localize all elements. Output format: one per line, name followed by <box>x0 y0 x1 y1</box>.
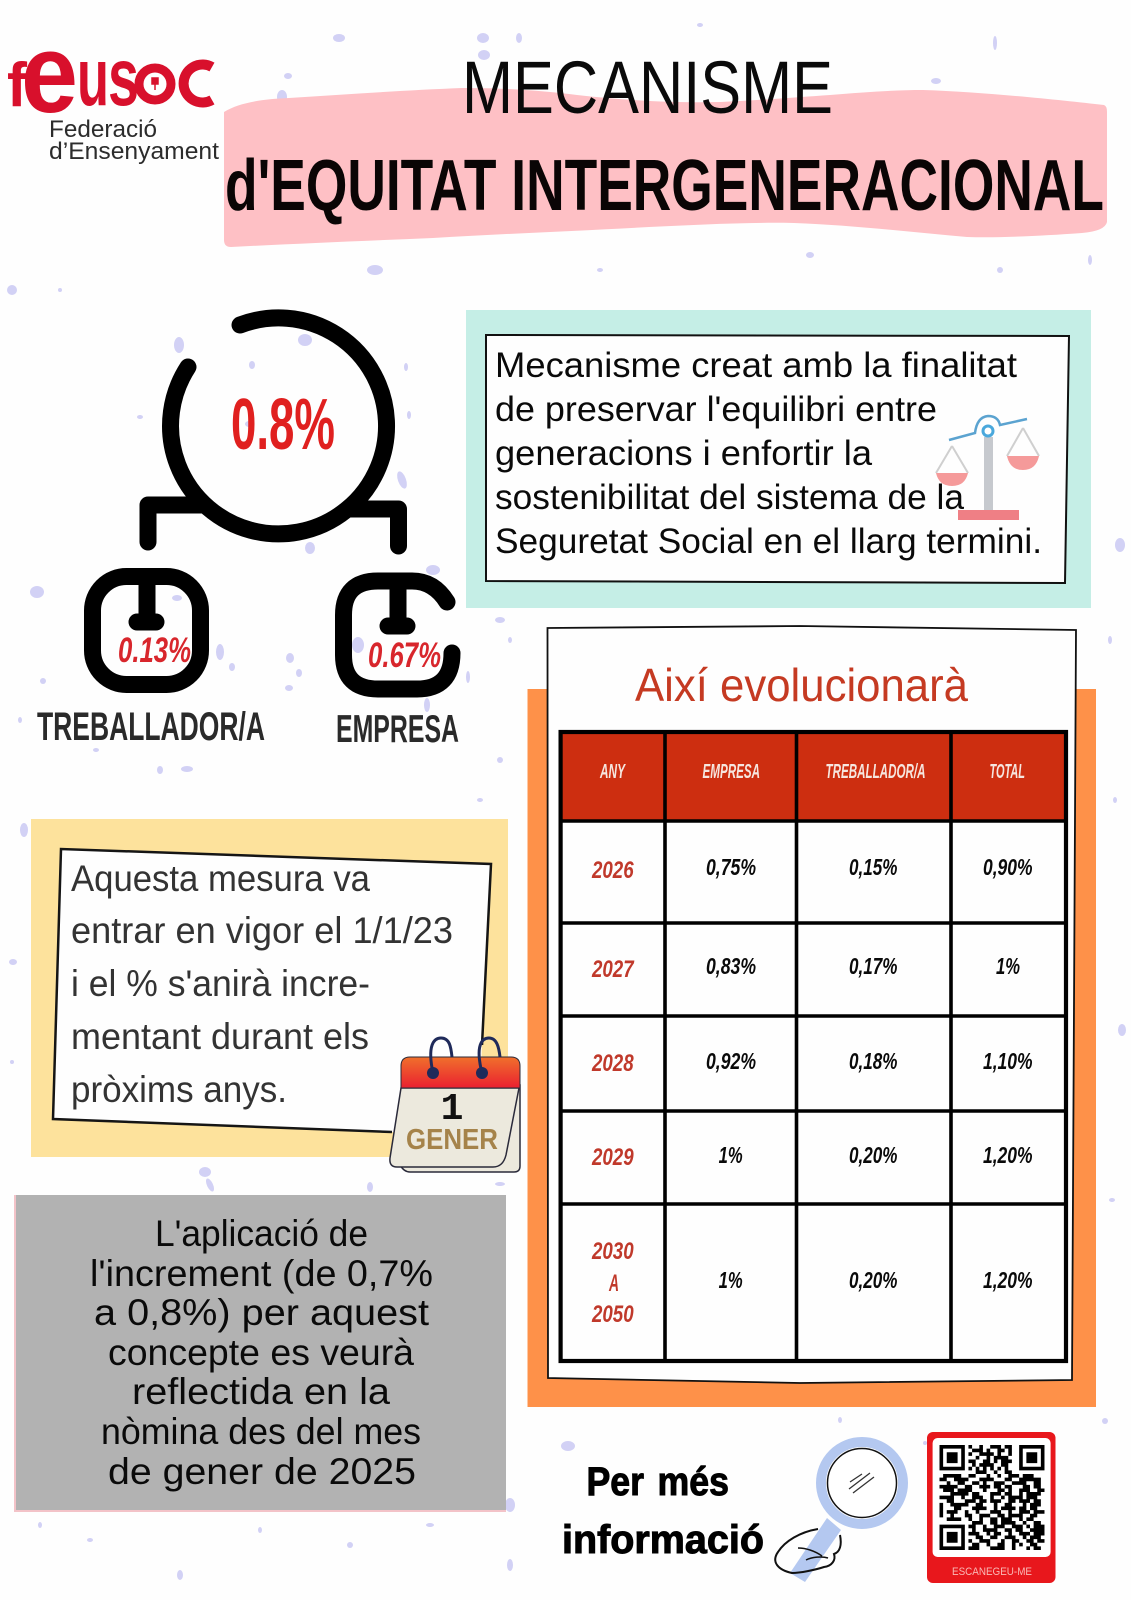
icon: worker node <box>92 576 200 684</box>
value: 0.67%: 0.67% <box>368 636 441 675</box>
text: per més informació <box>562 1460 764 1562</box>
text: payroll note: nòmina des del mes <box>101 1411 421 1452</box>
row: 2028: 0,18% <box>849 1048 897 1074</box>
row: 2030 a 2050: 1,20% <box>983 1267 1032 1293</box>
text: entry into force <box>71 858 453 1110</box>
logo: FEUSOC Federació d'Ensenyament: d’Ensenyament <box>49 138 219 165</box>
value: 0.8%: 0.8% <box>231 385 335 465</box>
heading: Així evolucionarà: Així evolucionarà <box>635 659 968 711</box>
text: per més informació: Per més <box>586 1460 729 1504</box>
title banner <box>224 46 1107 247</box>
label: worker: TREBALLADOR/A <box>37 705 265 749</box>
row: 2028: 0,92% <box>706 1048 756 1074</box>
logo: FEUSOC Federació d'Ensenyament: f <box>7 51 27 120</box>
row: 2026: 0,90% <box>983 854 1032 880</box>
icon: calendar 1 gener <box>390 1038 520 1172</box>
table header: TOTAL <box>990 761 1025 783</box>
icon: company node <box>344 581 452 689</box>
logo: FEUSOC Federació d'Ensenyament: e <box>21 11 78 136</box>
icon: calendar 1 gener: 1 <box>441 1088 463 1131</box>
text: payroll note: concepte es veurà <box>108 1332 414 1373</box>
text: entry into force: pròxims anys. <box>71 1069 287 1110</box>
row: 2030 a 2050 <box>591 1238 1032 1328</box>
row: 2026: 0,75% <box>706 854 756 880</box>
row: 2030 a 2050: 2050 <box>591 1301 634 1328</box>
row: 2026 <box>591 854 1032 884</box>
row: 2028: 1,10% <box>983 1048 1032 1074</box>
row: 2030 a 2050: A <box>608 1270 619 1297</box>
text: per més informació: informació <box>562 1518 764 1562</box>
text: entry into force: Aquesta mesura va <box>71 858 370 899</box>
value: 0.13%: 0.13% <box>118 631 191 670</box>
label: company: EMPRESA <box>336 708 459 751</box>
row: 2030 a 2050: 0,20% <box>849 1267 897 1293</box>
row: 2026: 2026 <box>591 857 634 884</box>
panel: payroll application note <box>14 1195 506 1512</box>
row: 2030 a 2050: 1% <box>719 1267 743 1293</box>
row: 2027: 0,17% <box>849 953 897 979</box>
text: payroll note: a 0,8%) per aquest <box>94 1292 430 1333</box>
title banner: MECANISME <box>462 46 833 129</box>
text: entry into force: mentant durant els <box>71 1016 369 1057</box>
logo: FEUSOC Federació d'Ensenyament: s <box>108 32 139 123</box>
text: definition: sostenibilitat del sistema de la <box>495 478 965 517</box>
text: payroll note: reflectida en la <box>132 1371 390 1412</box>
row: 2028 <box>591 1048 1032 1077</box>
row: 2029: 1% <box>719 1142 743 1168</box>
table header: TREBALLADOR/A <box>826 761 926 783</box>
qr code <box>940 1445 1044 1550</box>
table header <box>560 732 1066 821</box>
text: definition <box>495 346 1042 561</box>
row: 2029: 1,20% <box>983 1142 1032 1168</box>
row: 2026: 0,15% <box>849 854 897 880</box>
table header: EMPRESA <box>702 761 760 783</box>
text: definition: Seguretat Social en el llarg termini. <box>495 522 1042 561</box>
table header: ANY <box>599 761 626 783</box>
panel: entry into force <box>31 819 508 1157</box>
logo: FEUSOC Federació d'Ensenyament: u <box>77 32 109 123</box>
row: 2027: 2027 <box>591 956 635 983</box>
logo: FEUSOC Federació d'Ensenyament: Federació <box>49 116 157 143</box>
text: entry into force: i el % s'anirà incre- <box>71 963 370 1004</box>
text: payroll note <box>90 1213 433 1492</box>
row: 2030 a 2050: 2030 <box>591 1238 634 1265</box>
text: payroll note: L'aplicació de <box>155 1213 368 1254</box>
icon: magnifying glass with hand <box>775 1442 903 1582</box>
row: 2027: 1% <box>996 953 1020 979</box>
text: definition: de preservar l'equilibri entre <box>495 390 937 429</box>
icon: main circle with connectors <box>140 318 407 554</box>
row: 2029 <box>591 1142 1032 1171</box>
text: definition: generacions i enfortir la <box>495 434 873 473</box>
icon: calendar 1 gener: GENER <box>406 1124 498 1156</box>
caption: escanegeu-me: ESCANEGEU-ME <box>952 1566 1032 1578</box>
text: definition: Mecanisme creat amb la finalitat <box>495 346 1017 385</box>
text: payroll note: de gener de 2025 <box>108 1451 416 1492</box>
panel: mechanism definition <box>466 310 1091 608</box>
panel: evolution table <box>528 626 1096 1407</box>
text: entry into force: entrar en vigor el 1/1/23 <box>71 910 453 951</box>
qr code card <box>927 1432 1056 1583</box>
icon: scales <box>936 416 1039 520</box>
chart: 0.8% split diagram <box>37 318 459 751</box>
row: 2029: 2029 <box>591 1144 634 1171</box>
row: 2027: 0,83% <box>706 953 756 979</box>
row: 2027 <box>591 953 1020 983</box>
row: 2029: 0,20% <box>849 1142 897 1168</box>
row: 2028: 2028 <box>591 1050 634 1077</box>
logo: FEUSOC Federació d'Ensenyament <box>7 11 219 165</box>
text: payroll note: l'increment (de 0,7% <box>90 1253 433 1294</box>
